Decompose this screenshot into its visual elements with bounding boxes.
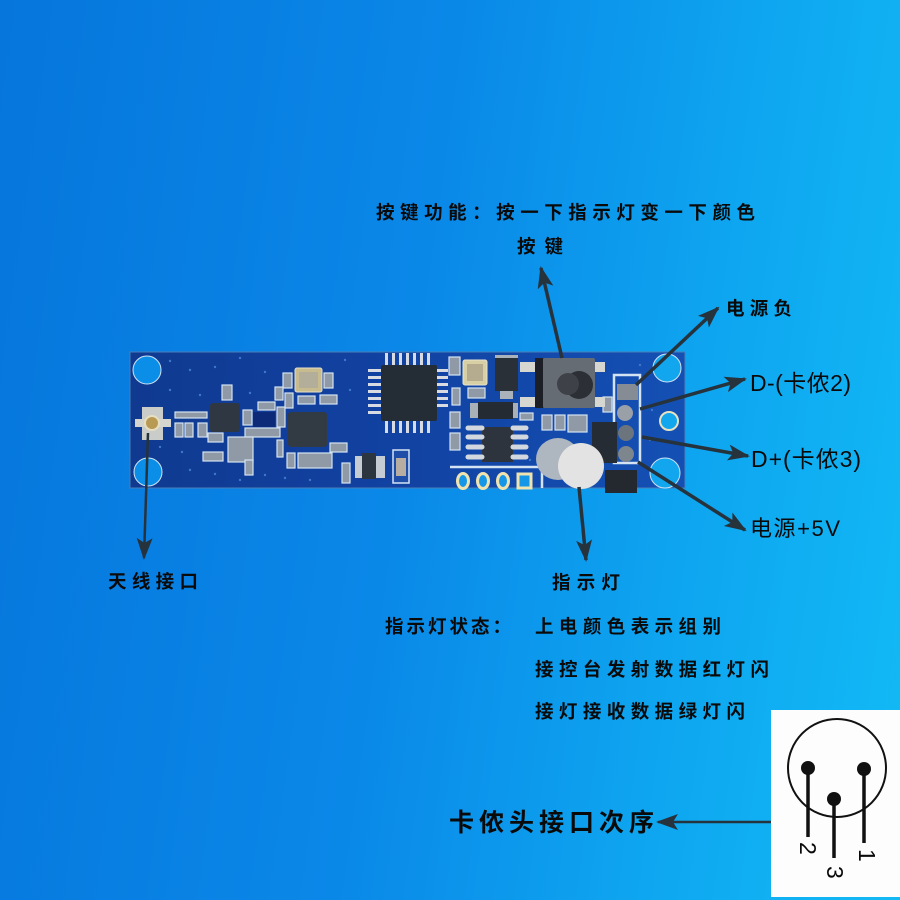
capacitor <box>393 450 409 483</box>
pin numbers: 2 <box>795 842 821 855</box>
text: indicator status: 接控台发射数据红灯闪 <box>535 659 769 680</box>
diode near header <box>592 422 617 463</box>
vias <box>159 357 653 481</box>
crystal 2 <box>463 360 487 385</box>
label: antenna connector: 天线接口 <box>108 571 198 592</box>
connector header pads <box>614 375 640 463</box>
arrow: antenna <box>144 433 148 558</box>
resistors right of center <box>449 357 612 450</box>
quad IC 2 <box>288 412 327 447</box>
pin numbers: 3 <box>822 866 848 879</box>
arrow: power negative <box>636 308 718 385</box>
arrow: power plus <box>638 462 745 530</box>
arrow: button <box>541 268 562 358</box>
text: indicator status: 指示灯状态： <box>385 616 511 637</box>
arrow: indicator <box>579 487 586 560</box>
label: button: 按键 <box>517 236 563 257</box>
arrow: D minus <box>640 379 745 409</box>
regulator <box>355 453 385 479</box>
arrow: D plus <box>642 437 748 456</box>
label: indicator: 指示灯 <box>552 572 620 593</box>
small components left <box>175 373 350 483</box>
push button <box>520 358 605 408</box>
text: indicator status <box>385 616 769 722</box>
text: indicator status: 接灯接收数据绿灯闪 <box>535 701 745 722</box>
label: D plus: D+(卡侬3) <box>751 446 861 472</box>
pin numbers <box>795 842 880 879</box>
arrow: XLR order <box>658 821 775 823</box>
through-hole pads <box>450 467 542 488</box>
LED indicator <box>536 438 604 489</box>
heading: button function: 按键功能：按一下指示灯变一下颜色 <box>376 202 755 223</box>
diode bottom <box>605 470 637 493</box>
panel: XLR pin diagram <box>771 710 900 897</box>
antenna connector <box>135 407 171 440</box>
pin numbers: 1 <box>854 849 880 862</box>
text: indicator status: 上电颜色表示组别 <box>535 616 721 637</box>
diode middle <box>470 402 518 419</box>
SOP chip <box>468 427 526 462</box>
label: power plus: 电源+5V <box>750 516 840 541</box>
label: XLR interface order: 卡侬头接口次序 <box>449 809 654 837</box>
diode top <box>495 355 518 399</box>
crystal <box>295 368 322 392</box>
main microcontroller <box>368 353 448 433</box>
label: D minus: D-(卡侬2) <box>750 370 851 396</box>
panel: circuit board <box>130 352 685 493</box>
dark pad <box>253 412 275 427</box>
mounting holes <box>133 354 681 488</box>
quad IC 1 <box>210 403 240 432</box>
label: power negative: 电源负 <box>726 298 792 319</box>
